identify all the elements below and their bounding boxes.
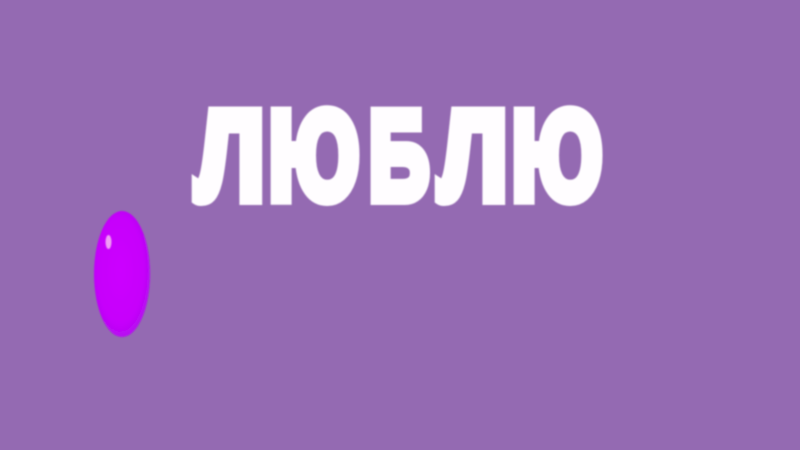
title: ЛЮБЛЮ xyxy=(196,87,602,226)
title: ЛЮБЛЮ: Ю xyxy=(512,87,602,226)
title: ЛЮБЛЮ: Л xyxy=(439,87,507,226)
title: ЛЮБЛЮ: Л xyxy=(196,87,264,226)
icon: purple balloon xyxy=(94,211,150,337)
balloon highlight xyxy=(106,235,112,249)
title: ЛЮБЛЮ: Ю xyxy=(269,87,359,226)
title: ЛЮБЛЮ: Б xyxy=(369,87,429,226)
